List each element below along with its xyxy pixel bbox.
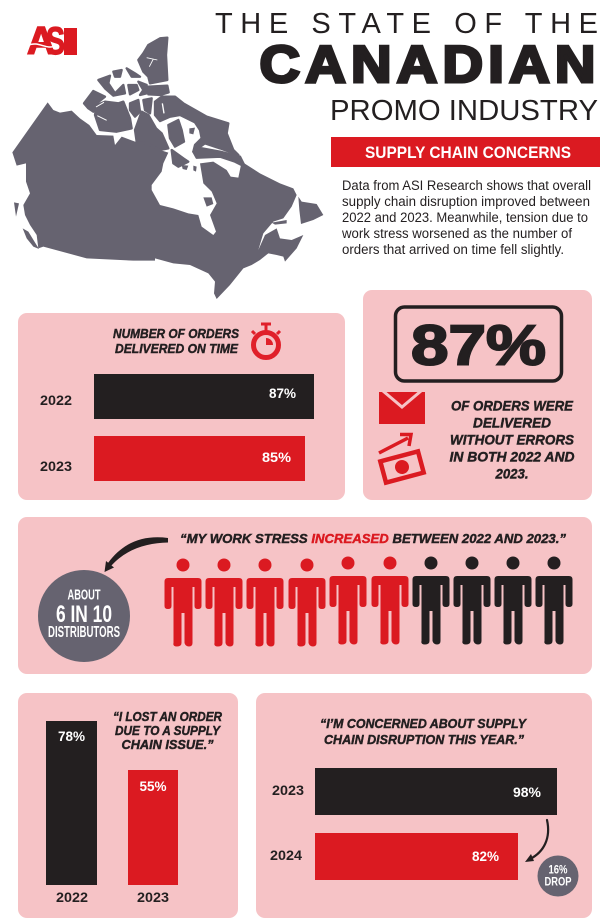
heading: orders delivered on time	[113, 326, 239, 356]
pictogram: six red of ten people	[164, 556, 572, 646]
quote: lost an order: “I LOST AN ORDER	[113, 710, 222, 724]
panel: 87 percent without errors	[363, 290, 592, 500]
title: CANADIAN	[260, 36, 595, 94]
bar: 2023 85%: 85%	[262, 450, 291, 465]
callout: 16% drop: DROP	[544, 874, 572, 888]
text: orders without errors: DELIVERED	[473, 414, 551, 430]
arrow: drop	[525, 820, 548, 862]
text: orders without errors: 2023.	[495, 466, 528, 482]
heading: orders delivered on time: NUMBER OF ORDERS	[113, 326, 239, 341]
bar: 2022 78%: 2022	[56, 890, 88, 905]
title: THE STATE OF THE	[215, 8, 598, 40]
intro text: orders that arrived on time fell slightly.	[342, 242, 564, 257]
intro text: Data from ASI Research shows that overall	[342, 178, 591, 193]
bar: 2024 82%	[270, 833, 518, 880]
panel: lost an order	[18, 693, 238, 918]
logo: ASI	[27, 20, 77, 63]
bar: 2022 87%: 87%	[269, 386, 296, 401]
callout: about 6 in 10 distributors: 6 IN 10	[56, 601, 112, 628]
panel: work stress	[18, 517, 592, 674]
quote: concerned about disruption	[320, 716, 527, 747]
icon: stopwatch	[252, 322, 280, 358]
quote: concerned about disruption: “I’M CONCERNED ABOUT SUPPLY	[320, 716, 527, 731]
quote: lost an order: CHAIN ISSUE.”	[122, 738, 214, 752]
intro text	[341, 178, 591, 257]
callout: 16% drop: 16%	[548, 864, 568, 876]
callout: about 6 in 10 distributors: ABOUT	[68, 588, 101, 604]
text: orders without errors: WITHOUT ERRORS	[450, 432, 575, 448]
title: PROMO INDUSTRY	[330, 95, 598, 127]
intro text: 2022 and 2023. Meanwhile, tension due to	[342, 210, 588, 225]
intro text: supply chain disruption improved between	[342, 194, 590, 209]
quote: concerned about disruption: CHAIN DISRUPTION THIS YEAR.”	[324, 732, 524, 747]
intro text: work stress worsened as the number of	[341, 226, 572, 241]
arrow: quote to circle	[104, 537, 168, 572]
bar: 2023 98%: 98%	[513, 785, 541, 800]
text: orders without errors: IN BOTH 2022 AND	[450, 448, 574, 464]
logo: ASI: A	[27, 20, 55, 63]
quote: work stress: “MY WORK STRESS INCREASED BETWEEN 2022 AND 2023.”	[180, 531, 566, 546]
logo: ASI: S	[46, 20, 65, 63]
bar: 2023 55%: 2023	[137, 890, 170, 905]
callout: 87%: 87%	[411, 314, 546, 378]
bar: 2022 87%	[40, 374, 314, 419]
callout: about 6 in 10 distributors	[38, 570, 130, 662]
icon: envelope	[379, 391, 425, 424]
icon: money with arrow	[379, 434, 424, 483]
callout: about 6 in 10 distributors: DISTRIBUTORS	[48, 624, 120, 641]
bar: 2023 98%: 2023	[272, 783, 305, 798]
bar: 2022 78%	[46, 721, 97, 905]
heading: orders delivered on time: DELIVERED ON TIME	[115, 341, 238, 356]
text: orders without errors: OF ORDERS WERE	[451, 398, 574, 414]
bar: 2022 78%: 78%	[58, 729, 85, 744]
panel: orders delivered on time	[18, 313, 345, 500]
title	[215, 8, 598, 127]
map of Canada	[12, 38, 323, 299]
panel: concerned about disruption	[256, 693, 592, 918]
bar: 2024 82%: 2024	[270, 848, 303, 863]
bar: 2023 98%	[272, 768, 557, 815]
bar: 2023 85%: 2023	[40, 459, 73, 474]
callout: 87%	[396, 307, 562, 381]
banner: supply chain concerns: SUPPLY CHAIN CONCERNS	[365, 143, 571, 162]
text: orders without errors	[450, 398, 575, 482]
bar: 2023 55%: 55%	[139, 779, 167, 794]
bar: 2022 87%: 2022	[40, 393, 72, 408]
bar: 2023 85%	[40, 436, 305, 481]
quote: lost an order	[113, 710, 222, 752]
callout: 16% drop	[538, 856, 578, 896]
bar: 2023 55%	[128, 770, 178, 905]
banner: supply chain concerns	[331, 137, 600, 167]
bar: 2024 82%: 82%	[472, 849, 499, 864]
quote: lost an order: DUE TO A SUPPLY	[115, 724, 222, 738]
